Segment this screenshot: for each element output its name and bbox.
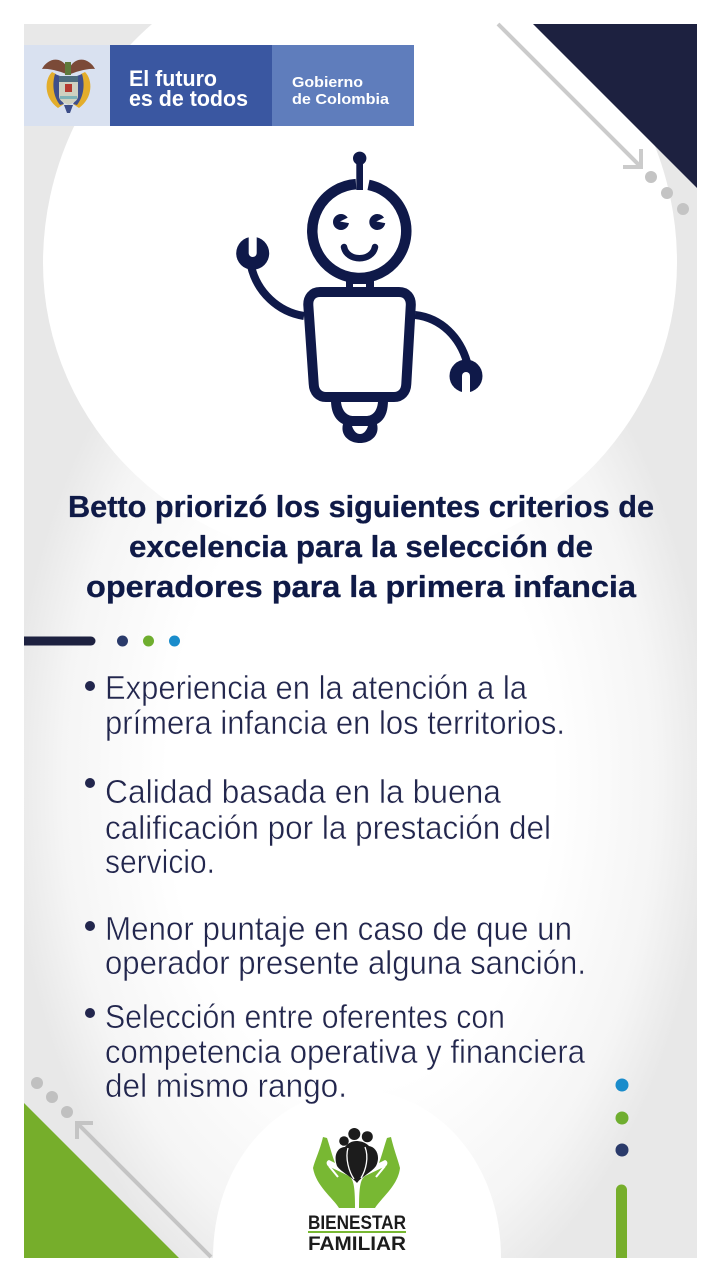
bullet 3: operador presente alguna sanción. <box>105 944 586 981</box>
bullet 3 <box>85 910 586 981</box>
bullet 2: calificación por la prestación del <box>105 809 551 846</box>
bullet 2: servicio. <box>105 843 215 880</box>
eyes <box>333 214 387 230</box>
text: Bienestar: BIENESTAR <box>308 1213 406 1234</box>
bullet 4: competencia operativa y financiera <box>105 1033 586 1070</box>
arrow: top right <box>498 24 641 167</box>
white circle: top <box>43 24 677 563</box>
bullet 4 <box>85 998 586 1104</box>
right arm <box>415 315 467 362</box>
text: El futuro es de todos: es de todos <box>129 86 248 111</box>
wrench right <box>450 360 482 395</box>
base <box>331 400 388 443</box>
left arm <box>251 266 304 316</box>
title: Betto priorizó los siguientes criterios de <box>68 490 654 524</box>
bullet 3: Menor puntaje en caso de que un <box>105 910 572 947</box>
text: El futuro es de todos: El futuro <box>129 66 217 91</box>
body <box>308 292 411 397</box>
wrench left <box>236 234 269 270</box>
bullet 1: prímera infancia en los territorios. <box>105 704 565 741</box>
text: Gobierno de Colombia <box>292 74 390 108</box>
text: El futuro es de todos <box>129 66 248 111</box>
corner triangle: green <box>24 1103 179 1258</box>
green bar <box>616 1184 627 1258</box>
antenna <box>353 152 366 190</box>
title: excelencia para la selección de <box>129 530 593 564</box>
text: Gobierno de Colombia: de Colombia <box>292 91 390 108</box>
bullet 4: Selección entre oferentes con <box>105 998 505 1035</box>
dots: bottom left <box>31 1077 73 1118</box>
neck <box>346 280 374 295</box>
bullet 2: Calidad basada en la buena <box>105 773 502 810</box>
divider with dots <box>24 636 180 646</box>
icon: robot <box>236 152 482 443</box>
bullet list <box>85 669 586 1104</box>
logo: Bienestar Familiar <box>308 1128 406 1255</box>
title: operadores para la primera infancia <box>86 570 637 604</box>
bullet 2 <box>85 773 551 880</box>
bullet 4: del mismo rango. <box>105 1067 347 1104</box>
head <box>312 184 406 278</box>
icon: hands <box>313 1137 400 1208</box>
icon: family <box>336 1128 378 1183</box>
white arch: bottom <box>213 1090 501 1258</box>
smile <box>344 247 375 258</box>
dots: top right <box>645 171 689 215</box>
dots: right side <box>616 1078 628 1156</box>
bullet 1: Experiencia en la atención a la <box>105 669 528 706</box>
bullet 1 <box>85 669 565 741</box>
text: Gobierno de Colombia: Gobierno <box>292 74 363 91</box>
icon: coat of arms <box>42 60 95 113</box>
logo: Gobierno de Colombia <box>24 45 414 126</box>
arrow: bottom left <box>77 1123 211 1257</box>
title <box>68 490 654 604</box>
text: Familiar: FAMILIAR <box>308 1234 406 1255</box>
corner triangle: navy <box>533 24 697 188</box>
